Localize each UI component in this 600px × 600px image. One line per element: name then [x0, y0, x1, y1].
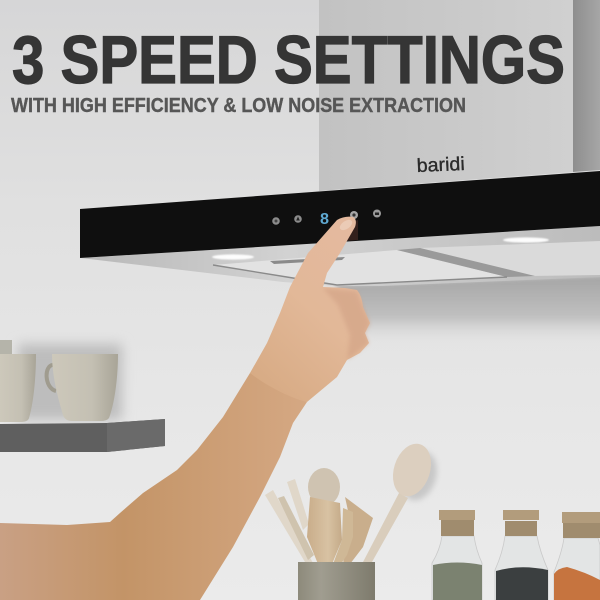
main spatula: [307, 497, 342, 564]
wall shadow behind mugs: [18, 344, 122, 420]
knuckle shading: [323, 288, 370, 360]
flat spatula right: [343, 497, 373, 564]
short dark rail: [270, 257, 345, 264]
pale spatula: [265, 490, 313, 563]
panel: hood underside: [81, 226, 600, 286]
slim spatula: [287, 479, 309, 530]
icon: touch button 4: [373, 210, 381, 218]
hand and finger: [250, 217, 370, 402]
panel: jars: [432, 510, 600, 600]
shelf: [0, 419, 165, 452]
jar 3: [554, 512, 600, 600]
icon: touch button 2: [294, 215, 302, 223]
spoon shadow: [395, 447, 443, 505]
filter panel right: [420, 241, 600, 276]
icon: touch button 1: [272, 217, 280, 225]
fingertip nail: [338, 218, 354, 232]
front rail: [213, 265, 507, 285]
panel: shadow beneath hood: [335, 274, 600, 345]
panel: hood chimney: [319, 0, 600, 191]
panel: arm and pointing hand: [0, 217, 370, 600]
wooden spoon: [363, 439, 437, 562]
mug left: [0, 354, 36, 422]
forearm: [0, 373, 307, 600]
pot: [298, 562, 375, 600]
panel: black glass control band: [80, 171, 600, 258]
pale spatula second: [278, 496, 314, 560]
panel: shelf with mugs: [0, 340, 165, 452]
brand logo: baridi: [416, 154, 465, 177]
subtitle: WITH HIGH EFFICIENCY & LOW NOISE EXTRACTION: [11, 95, 466, 117]
jar 1: [432, 510, 482, 600]
object behind mug: [0, 340, 12, 356]
filter panel left: [213, 250, 507, 285]
flat spatula middle: [333, 508, 353, 564]
jar 2: [495, 510, 548, 600]
light left: [212, 254, 254, 260]
short spoon: [308, 468, 340, 506]
icon: speed digit display: 8: [320, 211, 329, 228]
mug right: [52, 354, 118, 421]
light right: [503, 237, 549, 243]
panel: utensils in pot: [265, 439, 443, 600]
finger reflection: [345, 220, 358, 241]
icon: touch button 3: [350, 211, 358, 219]
mug handle: [47, 365, 56, 391]
centre rail: [397, 248, 535, 277]
